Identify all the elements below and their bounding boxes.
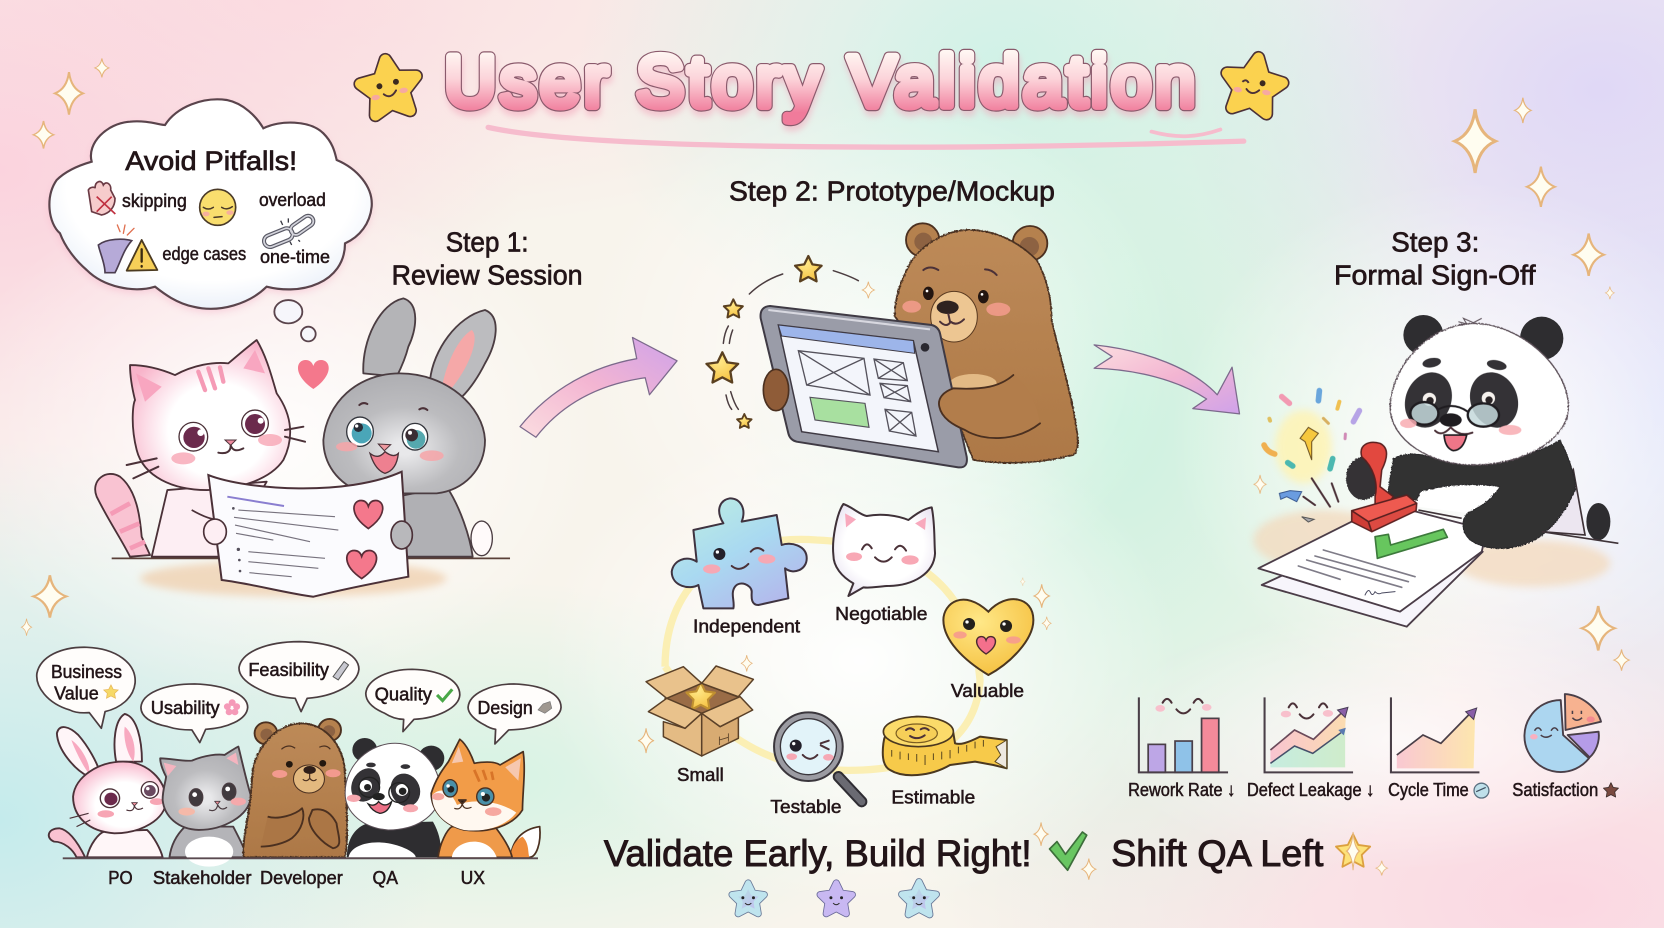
rework label: Rework Rate ↓ [1128,779,1235,800]
rabbit [323,298,496,557]
team animals [37,642,561,867]
team role labels: UX [461,867,485,888]
team panel [37,642,561,888]
step 3 heading: Formal Sign-Off [1334,259,1536,290]
step 3 heading [1334,227,1536,290]
bear face [902,268,1010,342]
icon: stop hand [88,182,115,215]
thought cloud: avoid pitfalls [49,99,372,341]
step 3 heading: Step 3: [1391,227,1479,258]
step 2 heading: Step 2: Prototype/Mockup [729,176,1055,207]
icon: broken stone and warning [98,225,157,273]
INVEST labels [677,603,1024,817]
desk line [1418,510,1618,543]
bottom tagline [604,822,1387,880]
team role labels [108,867,485,888]
step 1 heading: Review Session [392,259,583,290]
speech bubble labels: Value [54,682,99,703]
small box [638,655,753,756]
desk shadow [1253,510,1610,587]
cat [95,340,290,557]
documents [1258,504,1487,627]
icon: green check [1050,832,1087,870]
icon: left smiling star [357,56,421,117]
ring path [665,539,980,770]
pitfalls heading: Avoid Pitfalls! [125,146,297,176]
INVEST labels: Small [677,764,724,785]
decorative sparkles [21,58,1629,671]
confetti burst [1254,391,1359,522]
bear paws [763,369,1040,438]
thought bubbles [274,300,316,341]
chart drawings [1139,694,1601,772]
skipping label: skipping [122,190,187,211]
tablet [761,306,967,467]
shift qa left text: Shift QA Left [1111,832,1324,874]
panda body and arms [1387,440,1575,548]
team fox (UX) [431,739,540,857]
team role labels: QA [372,867,399,888]
team grey cat (stakeholder) [160,747,251,867]
one-time label: one-time [260,246,330,267]
speech bubble labels: Quality [375,683,433,704]
speech bubble labels [51,659,533,718]
star arc [707,256,874,428]
speech bubbles [37,642,561,744]
team rabbit (PO) [49,714,175,857]
step 1 heading [392,227,583,290]
sparkles [1034,822,1387,880]
table line [112,556,510,561]
speech bubble labels: Business [51,661,122,682]
panda face [1397,356,1526,451]
icon: broken chain [262,214,315,249]
INVEST labels: Testable [770,796,842,817]
chart: cycle time [1391,697,1479,772]
INVEST labels: Estimable [891,786,975,807]
icon: sleepy face [200,189,236,225]
illustration: panda stamping document [1253,315,1618,627]
star mascot 3 [902,882,936,915]
chart: satisfaction pie [1524,694,1601,772]
title text: User Story Validation [446,48,1196,127]
speech bubble labels: Design [478,697,533,718]
team role labels: Developer [260,867,343,888]
validate early text: Validate Early, Build Right! [604,832,1032,874]
speech bubble labels: Feasibility [248,659,330,680]
panda ears and head [1390,315,1568,465]
team role labels: PO [108,867,133,888]
illustration: cat and rabbit reviewing story [95,298,510,597]
cycle time label: Cycle Time [1388,779,1469,800]
tiny dancing stars [732,882,936,915]
cloud shape [49,99,372,312]
paper with hearts [208,472,408,597]
metric charts [1128,694,1618,800]
independent puzzle [672,498,807,608]
title text: User Story Validation [445,43,1195,122]
title [357,43,1286,147]
star mascot 2 [820,883,852,914]
valuable heart [943,578,1051,675]
arrow: step 2 to step 3 [1094,345,1240,414]
panda back and tail [1542,470,1610,540]
INVEST labels: Negotiable [835,603,928,624]
icon: right smiling star [1221,53,1286,116]
title underline [488,127,1244,147]
table shadow [140,560,447,597]
estimable tape measure [883,717,1007,775]
panda paw on stamp [1346,457,1381,500]
team ground line [63,856,538,861]
chart: defect leakage [1265,697,1353,772]
chart: rework rate [1139,697,1228,772]
star mascot 1 [732,883,764,914]
team panda (QA) [345,738,444,857]
satisfaction label: Satisfaction [1512,779,1598,800]
edge cases label: edge cases [162,243,246,264]
document lines [1298,550,1415,595]
team role labels: Stakeholder [153,867,252,888]
INVEST ring [638,498,1051,802]
illustration: bear with tablet [707,223,1078,467]
team bear (developer) [243,719,347,857]
white belly [1417,467,1507,513]
overload label: overload [259,189,326,210]
icon: gold star [1336,832,1370,870]
speech bubble labels: Usability [151,697,220,718]
bear body and head [895,223,1078,463]
title text: User Story Validation [445,43,1195,122]
testable magnifier [774,712,862,802]
INVEST labels: Independent [693,615,801,636]
defect label: Defect Leakage ↓ [1247,779,1374,800]
wireframes [798,351,916,436]
INVEST labels: Valuable [951,680,1024,701]
hearts [298,360,383,579]
red stamp [1352,442,1417,532]
rabbit face [336,403,444,473]
paws [204,519,412,549]
arrow: step 1 to step 2 [520,337,677,437]
cat face [127,410,305,478]
step 1 heading: Step 1: [446,227,528,258]
negotiable speech cat [833,504,935,596]
green check mark [1375,529,1447,558]
